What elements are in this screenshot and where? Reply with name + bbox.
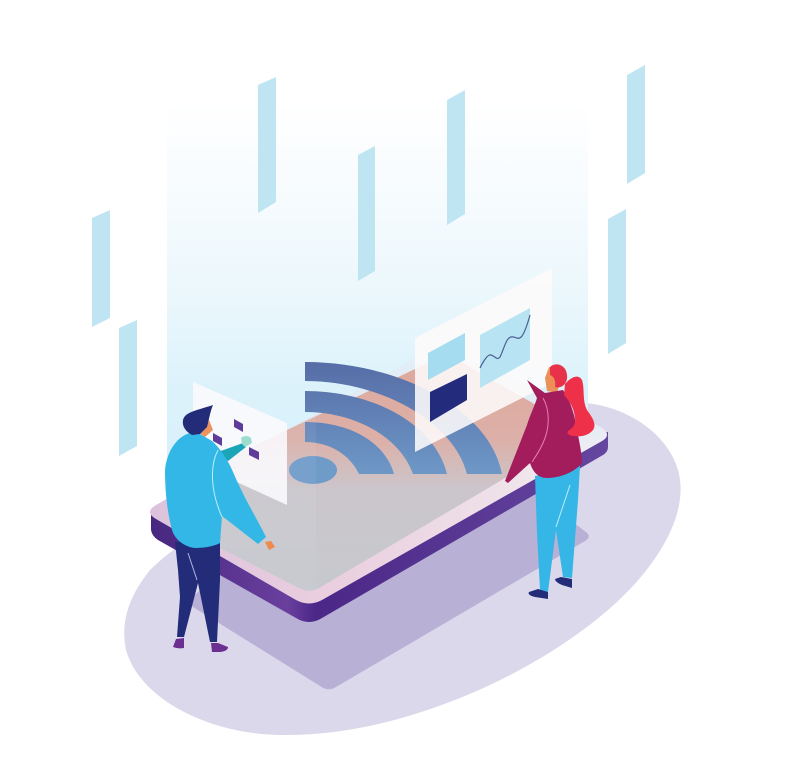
chart tile [480,308,530,388]
wifi inner arc [305,422,394,474]
man hair [183,405,213,435]
square 1 [234,419,243,432]
woman shoes [529,577,572,599]
man trouser seam [188,553,197,580]
floating bars [92,65,645,456]
square 2 [213,433,222,446]
phone body edge [151,432,608,622]
wifi dot [289,456,337,484]
square 3 [249,447,259,460]
navy tile [430,374,467,422]
purple touch squares [213,419,259,460]
wifi middle arc [305,391,447,474]
chart line [480,315,530,368]
woman [505,364,594,599]
phone shadow [185,470,589,689]
phone top rim [150,344,607,604]
woman face [545,367,560,393]
light beam [167,100,588,600]
small blue tile [428,333,465,380]
phone screen [180,356,580,591]
woman trousers [535,466,580,592]
man shoes [173,638,228,652]
panel background [415,268,552,452]
man trousers [175,541,220,642]
woman ponytail [564,377,594,436]
bar 5 [447,90,465,225]
man forearm raised [218,443,246,461]
woman hair [550,364,567,387]
bar 3 [258,77,276,213]
phone rim upper tint [150,344,607,604]
woman trouser seam [556,485,570,527]
man [165,405,275,652]
man face [199,420,213,437]
left floating panel [193,382,287,505]
man hand raised [241,436,252,447]
man sweater seam [212,450,222,517]
wifi symbol [289,362,502,484]
man sweater [165,433,266,548]
right floating panel [415,268,552,452]
left beam seam overlay [180,416,316,593]
woman sweater [505,380,582,483]
woman sweater seam [532,398,548,462]
man hand lower [265,541,275,550]
bar 7 [627,65,645,184]
bar 6 [608,209,626,354]
ground ellipse [124,403,681,735]
bar 1 [92,210,110,327]
bar 2 [119,320,137,456]
smartphone [150,344,608,622]
bar 4 [358,146,375,281]
wifi outer arc [305,362,502,474]
